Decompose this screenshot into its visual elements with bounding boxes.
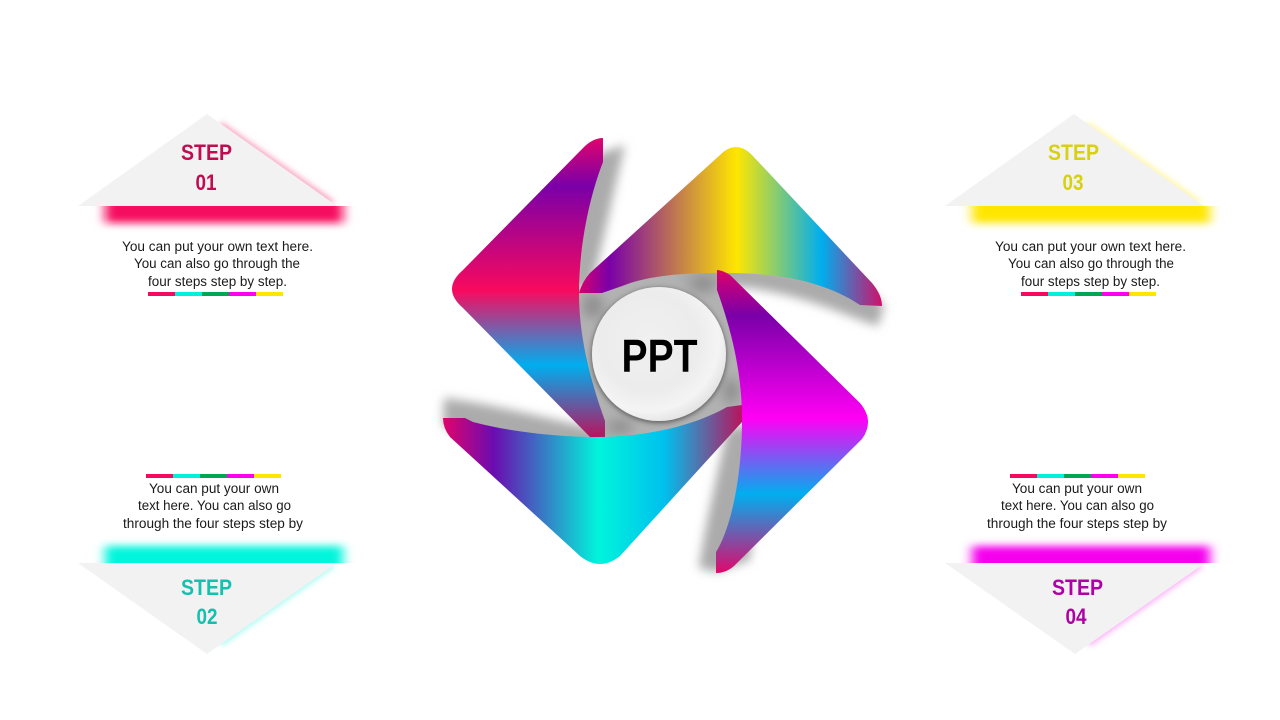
glow edge (1082, 122, 1203, 205)
colour strip (148, 292, 283, 296)
colour strip (1010, 474, 1145, 478)
panel: step 01 (78, 114, 343, 296)
heading: STEP (1048, 140, 1099, 165)
panel: step 04 (945, 474, 1210, 654)
cyan bar (105, 546, 343, 571)
yellow bar (972, 198, 1210, 223)
center circle (592, 287, 726, 421)
panel: step 02 (78, 474, 343, 654)
colour strip (1021, 292, 1156, 296)
description: You can also go through the (1008, 256, 1174, 271)
description: You can also go through the (134, 256, 300, 271)
description: You can put your own (149, 481, 279, 496)
petal: top yellow (579, 147, 882, 306)
heading: STEP (181, 140, 232, 165)
triangle (78, 563, 337, 654)
petal shadows (443, 145, 884, 572)
red bar (105, 198, 343, 223)
glow edge (1083, 563, 1204, 646)
central pinwheel graphic (443, 138, 884, 573)
petal: left pink (452, 138, 605, 437)
glow edge (215, 122, 336, 205)
description: four steps step by step. (1021, 274, 1160, 289)
panel: step 03 (945, 114, 1210, 296)
description: through the four steps step by (987, 516, 1167, 531)
magenta bar (972, 546, 1210, 571)
number: 04 (1066, 604, 1087, 629)
petal: bottom cyan (443, 405, 742, 564)
description: text here. You can also go (1001, 498, 1154, 513)
heading: STEP (1052, 575, 1103, 600)
colour strip (146, 474, 281, 478)
glow edge (215, 563, 336, 646)
heading: STEP (181, 575, 232, 600)
description: You can put your own text here. (995, 239, 1186, 254)
triangle (945, 563, 1205, 654)
number: 03 (1062, 170, 1084, 195)
description: You can put your own text here. (122, 239, 313, 254)
petal: right magenta (716, 270, 868, 573)
number: 02 (196, 604, 218, 629)
description: You can put your own (1012, 481, 1142, 496)
center label: PPT (622, 330, 698, 382)
description: text here. You can also go (138, 498, 291, 513)
triangle (945, 114, 1204, 206)
number: 01 (196, 170, 216, 195)
description: four steps step by step. (148, 274, 287, 289)
description: through the four steps step by (123, 516, 303, 531)
triangle (78, 114, 337, 206)
